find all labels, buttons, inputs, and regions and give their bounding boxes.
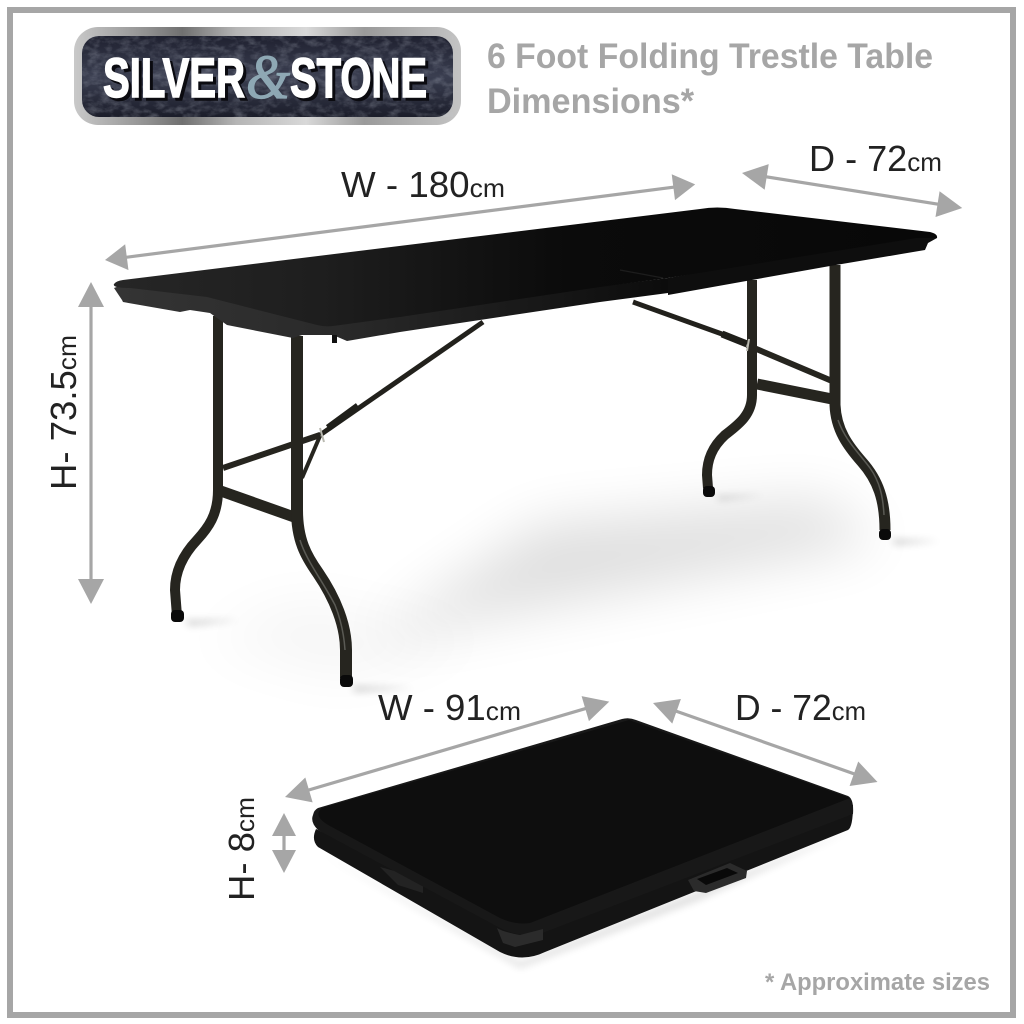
label: W 180cm: W - 180cm [341,164,505,205]
arrow: H 8 [272,813,296,873]
logo: Silver & Stone: STONE [293,49,430,112]
arrow: W 180 [103,172,697,273]
label: D 72cm folded: D - 72cm [735,687,866,728]
floor shadow of the open table [184,495,940,692]
logo: Silver & Stone: & [246,44,290,112]
arrow: D 72 top [740,160,964,221]
logo: Silver & Stone: SILVER [106,49,248,112]
shadow [315,830,852,968]
title: Dimensions* [487,82,694,121]
logo: Silver & Stone [74,27,461,125]
table top surface [114,208,937,326]
table top edge left half [114,278,668,341]
lower half of folded table [314,805,853,958]
upper half of folded table [312,718,853,935]
logo: Silver & Stone: STONE [290,46,427,109]
side protector [380,867,423,893]
logo: Silver & Stone: SILVER [103,46,245,109]
footnote: * Approximate sizes [765,969,990,996]
fold line on table top [620,270,663,278]
right leg assembly [633,265,891,540]
title: 6 Foot Folding Trestle Table [487,37,933,76]
latch [332,335,337,343]
left leg assembly [171,316,483,687]
arrow: W 91 [281,689,613,809]
carry handle [688,863,747,893]
top surface of folded table [318,720,850,923]
corner protector [497,928,543,947]
label: H 73.5cm: H- 73.5cm [43,335,84,490]
title [487,37,933,121]
arrow: H 73.5 [78,282,104,604]
table top edge right half [668,232,937,295]
arrow: D 72 folded [649,691,882,794]
folded table [312,718,853,968]
open table [114,208,937,687]
label: W 91cm: W - 91cm [378,687,521,728]
label: H 8cm: H- 8cm [221,797,262,901]
label: D 72cm top: D - 72cm [809,138,942,179]
